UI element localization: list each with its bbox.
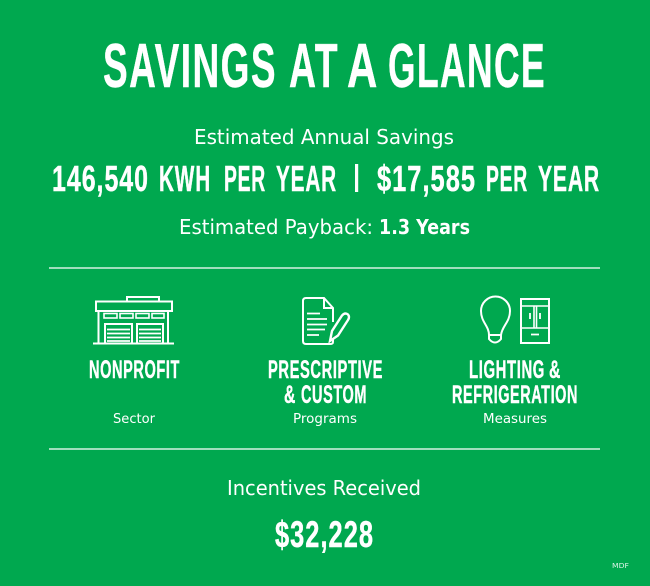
label: prescriptive and custom programs: &	[284, 381, 296, 409]
incentives heading: Incentives Received	[227, 476, 421, 500]
label: nonprofit sector: NONPROFIT	[89, 356, 180, 384]
estimated payback	[179, 215, 470, 239]
credit: MDF	[612, 562, 629, 570]
label: prescriptive and custom programs: PRESCRIPTIVE	[268, 356, 383, 384]
label: nonprofit sector	[89, 356, 180, 427]
savings figures: 146,540	[52, 158, 149, 199]
label: prescriptive and custom programs: CUSTOM	[301, 381, 367, 409]
label: lighting and refrigeration measures: Measures	[483, 412, 547, 427]
icon: warehouse building	[93, 297, 174, 344]
savings figures: KWH	[159, 158, 211, 199]
estimated payback: 1.3 Years	[379, 215, 470, 239]
subheading: estimated annual savings: Estimated Annual Savings	[194, 125, 454, 149]
label: nonprofit sector: Sector	[113, 412, 156, 427]
estimated payback: Estimated Payback:	[179, 215, 373, 239]
icon: light bulb	[481, 296, 510, 342]
savings figures: PER	[486, 158, 528, 199]
label: lighting and refrigeration measures	[452, 356, 578, 427]
label: prescriptive and custom programs	[268, 356, 383, 427]
label: lighting and refrigeration measures: LIGHTING	[469, 356, 545, 384]
title: SAVINGS	[103, 32, 277, 101]
incentives amount: $32,228	[275, 514, 374, 555]
label: prescriptive and custom programs: Programs	[293, 412, 357, 427]
icon: refrigerator	[521, 299, 549, 343]
title	[103, 32, 546, 101]
savings figures: $17,585	[377, 158, 476, 199]
savings figures: PER	[224, 158, 266, 199]
savings figures	[52, 158, 600, 199]
label: lighting and refrigeration measures: &	[549, 356, 561, 384]
title: A	[347, 32, 379, 101]
savings figures: YEAR	[538, 158, 600, 199]
title: AT	[289, 32, 339, 101]
icon: document with pencil	[303, 298, 349, 344]
savings figures: YEAR	[276, 158, 337, 199]
